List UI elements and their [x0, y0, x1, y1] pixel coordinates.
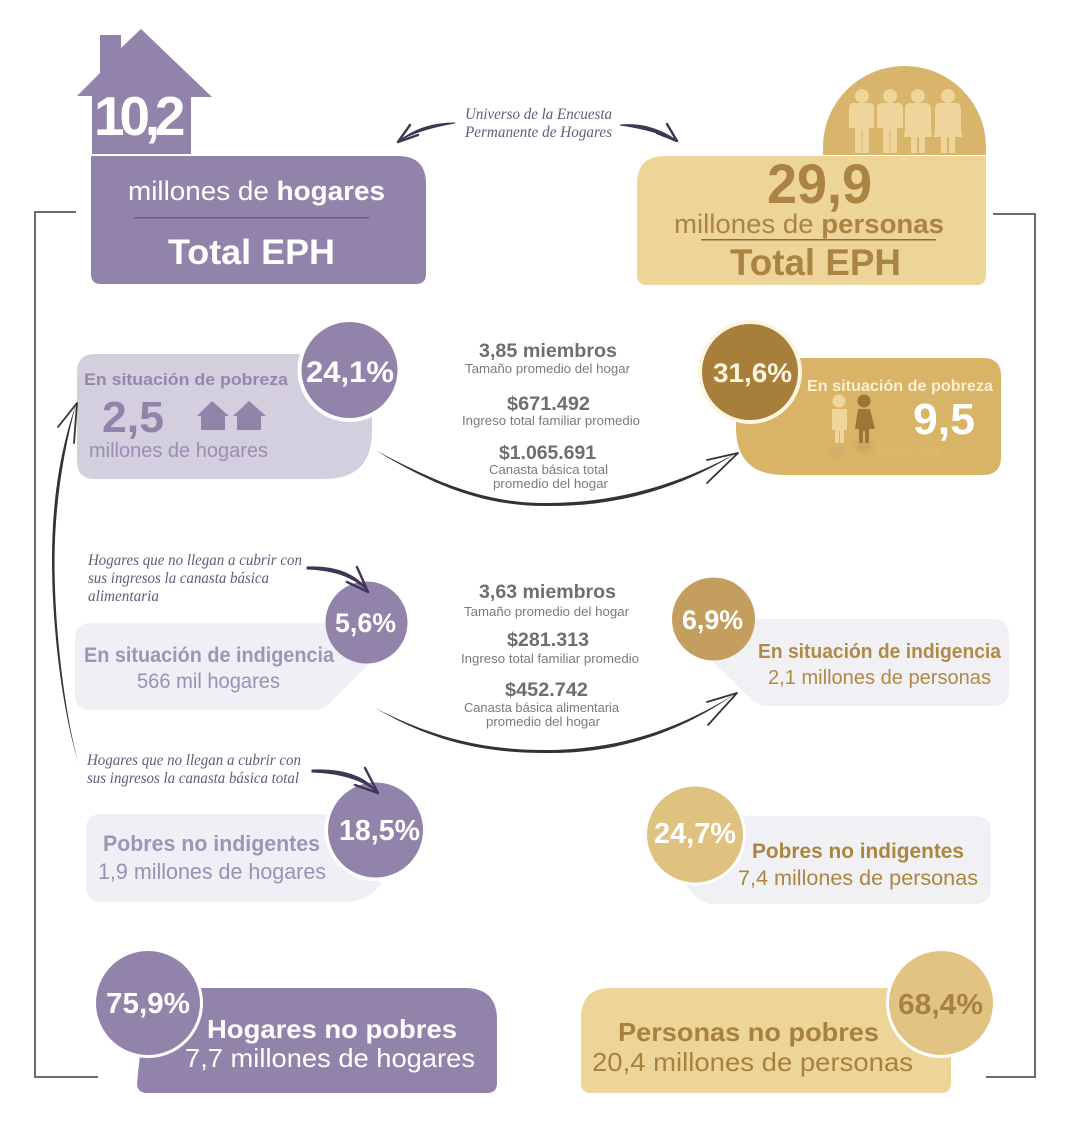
- note: total basket definition: sus ingresos la canasta básica total: [87, 770, 299, 787]
- badge: 24,1%: [298, 318, 402, 422]
- stats: poverty averages: 3,85 miembros: [479, 341, 617, 362]
- badge: 31,6%: 31,6%: [713, 358, 792, 388]
- detail: 7,7 millones de hogares: [185, 1043, 475, 1073]
- badge: 18,5%: 18,5%: [339, 815, 420, 847]
- people box: [637, 156, 986, 285]
- detail: 20,4 millones de personas: [592, 1047, 913, 1077]
- arrow: to households: [398, 123, 455, 142]
- panel: people not poor: [581, 948, 996, 1093]
- arrow: note to 18,5%: [312, 768, 378, 793]
- badge: 75,9%: 75,9%: [106, 988, 190, 1020]
- badge: 68,4%: 68,4%: [898, 989, 983, 1021]
- stats: poverty averages: promedio del hogar: [493, 476, 609, 491]
- number: 2,5: [102, 393, 164, 442]
- badge: 18,5%: [324, 779, 426, 881]
- unit: millones de hogares: [89, 440, 268, 462]
- left bracket connector: [35, 212, 98, 1077]
- note: total basket definition: Hogares que no llegan a cubrir con: [86, 752, 301, 769]
- icon: two houses: [197, 401, 266, 430]
- badge: 24,1%: 24,1%: [306, 356, 394, 389]
- arrow: to people: [620, 124, 677, 141]
- note: total basket definition: [86, 752, 301, 787]
- badge: 6,9%: [672, 578, 755, 660]
- people unit label: millones de personas: [674, 209, 944, 239]
- panel: people poor non-indigent: [644, 784, 991, 904]
- stats: indigence averages: [461, 582, 639, 729]
- detail: 1,9 millones de hogares: [98, 859, 326, 884]
- stats: indigence averages: $452.742: [505, 680, 588, 701]
- badge: 5,6%: [326, 582, 408, 664]
- stats: indigence averages: Tamaño promedio del hogar: [464, 604, 630, 619]
- panel: households in poverty: [77, 318, 402, 479]
- badge: 31,6%: [698, 320, 802, 424]
- note: food basket definition: alimentaria: [88, 588, 159, 605]
- note: food basket definition: sus ingresos la canasta básica: [88, 570, 269, 587]
- note: food basket definition: [87, 552, 302, 605]
- long arrow: poverty sum: [52, 403, 78, 762]
- note: survey universe: [464, 106, 612, 141]
- panel: people in indigence: [672, 578, 1009, 706]
- people total number: 29,9: [767, 152, 872, 215]
- stats: indigence averages: 3,63 miembros: [479, 582, 616, 603]
- stats: poverty averages: [462, 341, 640, 491]
- arrow: poverty households to people: [375, 450, 738, 506]
- icon: dome with people: [823, 66, 986, 155]
- number: 9,5: [913, 395, 975, 444]
- badge: 24,7%: 24,7%: [654, 818, 736, 850]
- heading: Pobres no indigentes: [752, 839, 964, 863]
- stats: indigence averages: Canasta básica alimentaria: [464, 700, 620, 715]
- heading: Hogares no pobres: [207, 1014, 457, 1044]
- heading: Personas no pobres: [618, 1017, 879, 1047]
- note: survey universe: Universo de la Encuesta: [465, 106, 612, 123]
- households total heading: Total EPH: [168, 233, 335, 272]
- stats: indigence averages: promedio del hogar: [486, 714, 601, 729]
- panel: total households: [77, 29, 426, 284]
- badge: 75,9%: [93, 948, 203, 1058]
- panel: households not poor: [93, 948, 497, 1093]
- households total number: 10,2: [94, 85, 184, 147]
- heading: En situación de indigencia: [84, 644, 334, 667]
- heading: En situación de pobreza: [84, 370, 289, 389]
- panel: households in indigence: [75, 582, 408, 710]
- detail: 566 mil hogares: [137, 670, 280, 693]
- badge: 5,6%: 5,6%: [335, 608, 396, 638]
- heading: Pobres no indigentes: [103, 831, 320, 856]
- people total heading: Total EPH: [730, 242, 901, 283]
- badge: 6,9%: 6,9%: [682, 605, 743, 635]
- stats: indigence averages: $281.313: [507, 630, 589, 651]
- arrow: note to 5,6%: [307, 567, 368, 592]
- note: survey universe: Permanente de Hogares: [464, 124, 612, 141]
- stats: poverty averages: Canasta básica total: [489, 462, 608, 477]
- households unit label: millones de hogares: [128, 176, 385, 206]
- stats: poverty averages: $1.065.691: [499, 443, 596, 464]
- icon: man and woman: [832, 394, 875, 443]
- detail: 2,1 millones de personas: [768, 666, 991, 689]
- note: food basket definition: Hogares que no llegan a cubrir con: [87, 552, 302, 569]
- stats: poverty averages: $671.492: [507, 394, 590, 415]
- badge: 68,4%: [886, 948, 996, 1058]
- panel: total people: [637, 66, 986, 285]
- panel: households poor non-indigent: [86, 779, 426, 902]
- stats: poverty averages: Tamaño promedio del hogar: [465, 361, 631, 376]
- stats: poverty averages: Ingreso total familiar promedio: [462, 413, 640, 428]
- icon: house: [77, 29, 212, 154]
- arrow: indigence households to people: [375, 693, 737, 753]
- stats: indigence averages: Ingreso total familiar promedio: [461, 651, 639, 666]
- badge: 24,7%: [644, 784, 746, 886]
- right bracket connector: [986, 214, 1035, 1077]
- decorative reflection: [826, 442, 942, 455]
- heading: En situación de indigencia: [758, 640, 1002, 663]
- heading: En situación de pobreza: [807, 378, 993, 395]
- panel: people in poverty: [698, 320, 1001, 475]
- households box: [91, 156, 426, 284]
- detail: 7,4 millones de personas: [738, 867, 978, 890]
